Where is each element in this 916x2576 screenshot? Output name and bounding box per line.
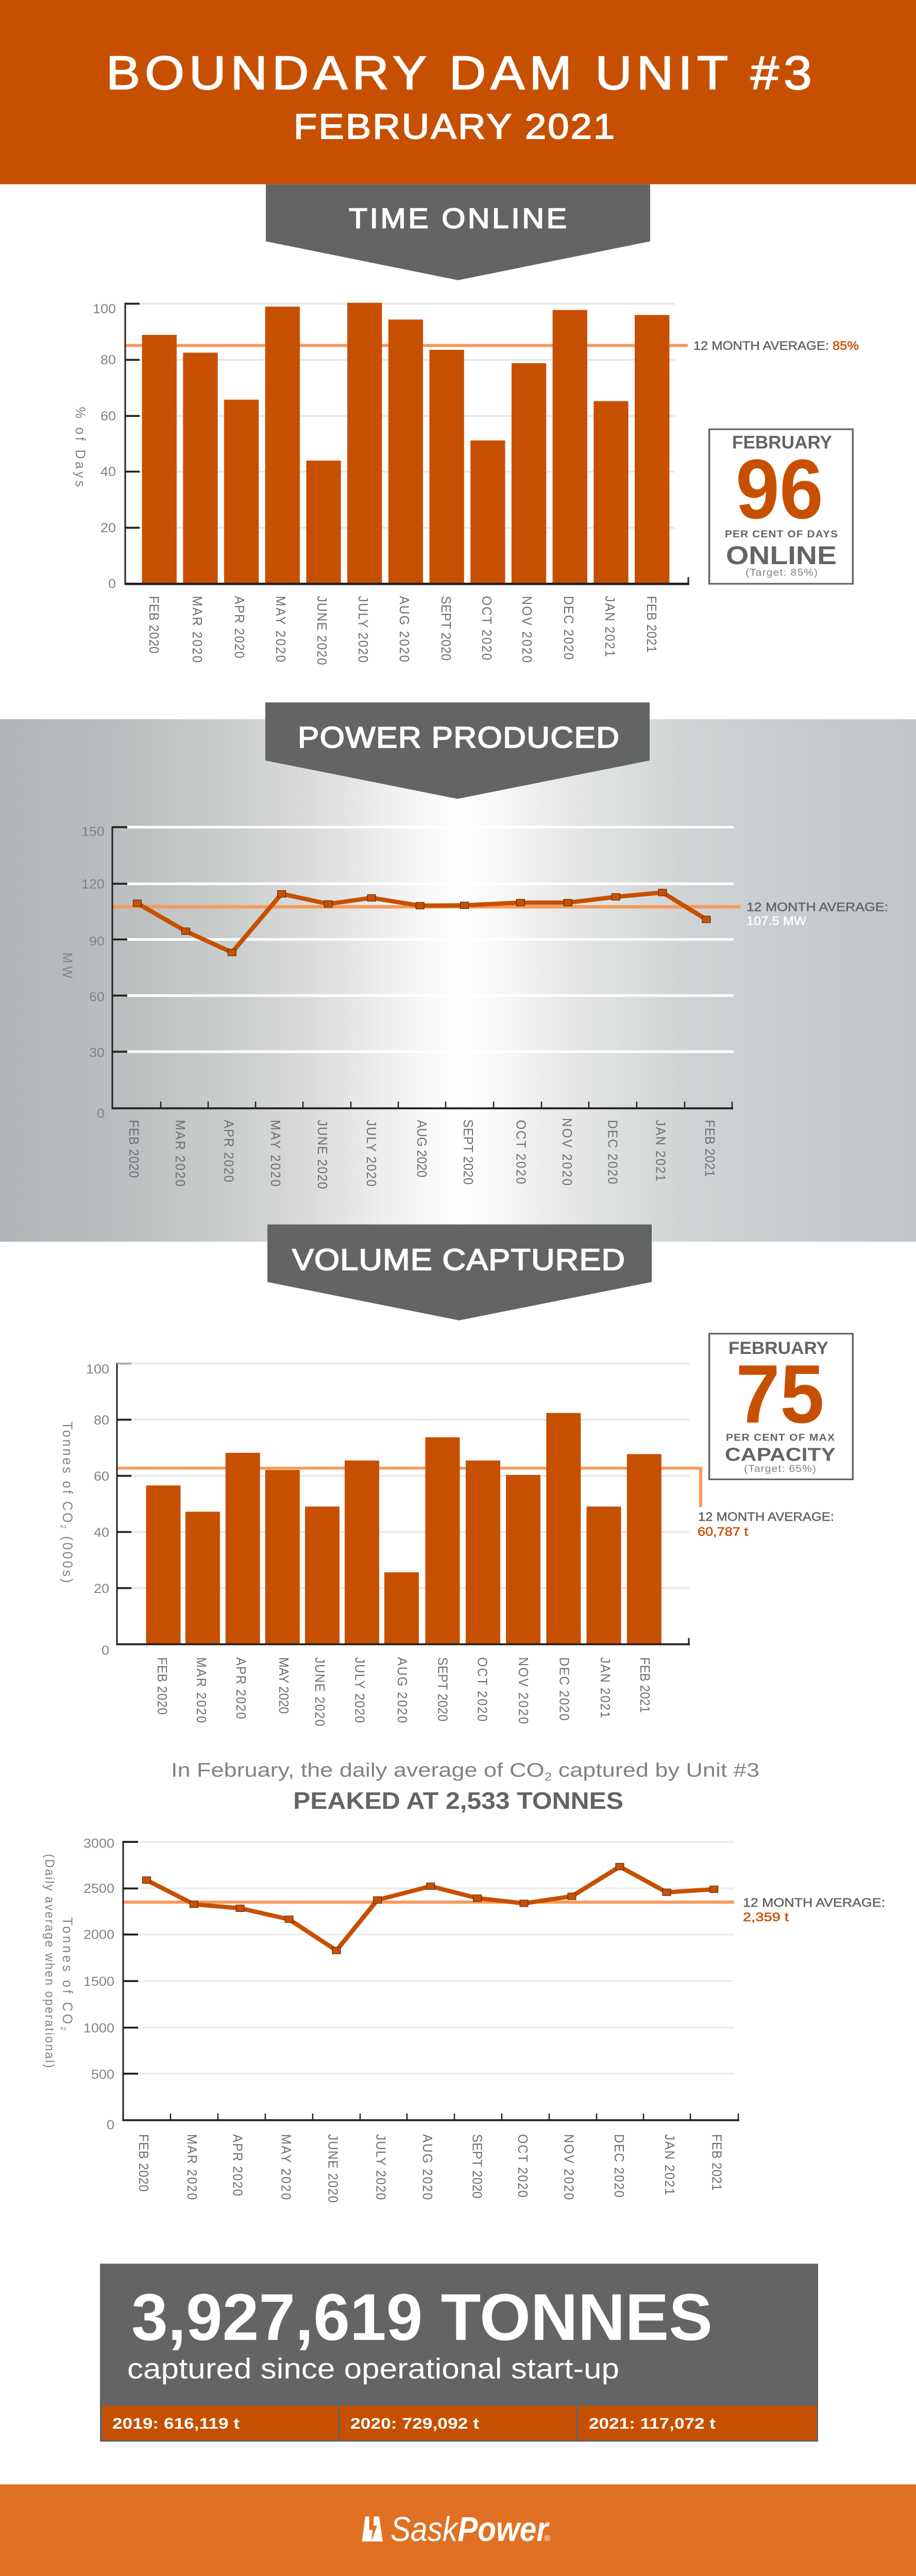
panel: time online bbox=[73, 184, 859, 665]
callout: february online: ONLINE bbox=[726, 541, 837, 570]
callout: february online: 96 bbox=[736, 442, 823, 536]
y axis labels: 150 bbox=[81, 824, 105, 839]
captured caption: captured since operational start-up bbox=[127, 2353, 619, 2385]
callout: february online: (Target: 85%) bbox=[745, 567, 818, 578]
month labels bbox=[126, 1118, 717, 1189]
y axis labels: 90 bbox=[89, 934, 105, 948]
axes bbox=[123, 1841, 739, 2121]
average label bbox=[743, 1896, 885, 1924]
icon: saskpower logo mark bbox=[362, 2517, 383, 2541]
y axis labels: 0 bbox=[107, 2117, 114, 2132]
12 month average line bbox=[117, 1468, 701, 1507]
bars bbox=[142, 303, 669, 584]
y axis labels bbox=[86, 1362, 109, 1658]
month labels: JAN 2021 bbox=[598, 1657, 613, 1718]
y axis labels: 2500 bbox=[83, 1881, 114, 1896]
month labels: OCT 2020 bbox=[474, 1657, 489, 1721]
average label: 60,787 t bbox=[698, 1525, 748, 1539]
callout: february capacity: (Target: 65%) bbox=[744, 1464, 816, 1475]
average label: 12 MONTH AVERAGE: bbox=[747, 900, 888, 914]
month labels: APR 2020 bbox=[232, 596, 247, 658]
month labels: AUG 2020 bbox=[414, 1120, 429, 1177]
month labels: NOV 2020 bbox=[561, 2134, 576, 2200]
month labels: OCT 2020 bbox=[515, 2134, 530, 2197]
y axis labels: 0 bbox=[101, 1643, 109, 1658]
month labels: JULY 2020 bbox=[373, 2134, 388, 2200]
y axis title: % of Days bbox=[73, 407, 89, 487]
title: BOUNDARY DAM UNIT #3 bbox=[106, 46, 812, 99]
intro sentence: In February, the daily average of CO bbox=[171, 1759, 511, 1781]
y axis labels: 1000 bbox=[83, 2021, 114, 2036]
month labels: SEPT 2020 bbox=[469, 2134, 484, 2198]
y axis labels bbox=[81, 824, 105, 1121]
subtitle: FEBRUARY 2021 bbox=[294, 107, 615, 147]
callout: february online: PER CENT OF DAYS bbox=[725, 529, 838, 540]
month labels bbox=[155, 1657, 652, 1726]
average label: 12 MONTH AVERAGE: bbox=[698, 1510, 834, 1524]
y axis labels: 20 bbox=[100, 520, 116, 535]
y axis labels: 500 bbox=[91, 2067, 114, 2082]
saskpower wordmark: SaskPower bbox=[391, 2510, 550, 2548]
month labels: JUNE 2020 bbox=[315, 1120, 330, 1189]
axes bbox=[116, 1363, 690, 1645]
month labels: JUNE 2020 bbox=[325, 2134, 340, 2202]
month labels: MAY 2020 bbox=[276, 1657, 291, 1714]
y axis labels: 100 bbox=[93, 301, 116, 316]
12 month average line bbox=[112, 905, 740, 909]
y axis labels: 0 bbox=[108, 577, 116, 591]
line chart: daily average bbox=[42, 1836, 885, 2202]
month labels: FEB 2021 bbox=[709, 2134, 724, 2191]
month labels: MAY 2020 bbox=[278, 2134, 293, 2200]
intro sentence: 2 bbox=[545, 1770, 552, 1783]
line chart: power produced bbox=[60, 824, 888, 1189]
month labels: AUG 2020 bbox=[420, 2134, 435, 2200]
callout: february capacity bbox=[709, 1334, 853, 1479]
month labels: DEC 2020 bbox=[556, 1657, 571, 1721]
y axis labels bbox=[93, 301, 116, 591]
callout: february online bbox=[709, 429, 853, 584]
y axis labels: 3000 bbox=[83, 1836, 114, 1851]
y axis labels: 30 bbox=[89, 1045, 105, 1060]
data markers bbox=[143, 1863, 718, 1954]
month labels: JUNE 2020 bbox=[314, 596, 329, 665]
y axis title: 2 bbox=[59, 2026, 67, 2030]
data markers bbox=[133, 889, 710, 956]
section heading: time online: TIME ONLINE bbox=[349, 202, 567, 234]
month labels: DEC 2020 bbox=[612, 2134, 626, 2197]
yearly totals: 2021: 117,072 t bbox=[589, 2415, 716, 2432]
month labels: FEB 2020 bbox=[146, 596, 161, 653]
callout: february capacity: FEBRUARY bbox=[728, 1338, 828, 1358]
yearly totals: 2020: 729,092 t bbox=[350, 2415, 479, 2432]
callout: february capacity: PER CENT OF MAX bbox=[726, 1432, 835, 1443]
data line bbox=[137, 892, 706, 953]
month labels bbox=[146, 596, 659, 665]
peak heading: PEAKED AT 2,533 TONNES bbox=[293, 1787, 623, 1814]
registered mark: ® bbox=[544, 2534, 551, 2543]
panel: total captured bbox=[100, 2264, 818, 2442]
y axis labels: 20 bbox=[94, 1581, 109, 1596]
y axis title: MW bbox=[60, 953, 76, 978]
y axis labels bbox=[83, 1836, 114, 2132]
callout: february capacity: 75 bbox=[736, 1348, 824, 1440]
total tonnes: 3,927,619 TONNES bbox=[131, 2280, 713, 2354]
month labels: JUNE 2020 bbox=[312, 1657, 327, 1726]
month labels: JAN 2021 bbox=[653, 1120, 668, 1181]
month labels: FEB 2020 bbox=[126, 1120, 141, 1178]
month labels: NOV 2020 bbox=[519, 596, 534, 663]
month labels: AUG 2020 bbox=[395, 1657, 410, 1723]
y axis labels: 40 bbox=[100, 464, 116, 479]
y axis labels: 60 bbox=[94, 1469, 109, 1484]
callout: february online: FEBRUARY bbox=[732, 432, 832, 452]
yearly totals bbox=[102, 2405, 817, 2440]
yearly totals: 2019: 616,119 t bbox=[112, 2415, 240, 2432]
month labels: MAR 2020 bbox=[194, 1657, 209, 1723]
average label bbox=[747, 900, 888, 928]
panel: power produced bbox=[0, 702, 916, 1242]
month labels: DEC 2020 bbox=[561, 596, 576, 659]
header banner bbox=[0, 0, 916, 184]
callout: february capacity: CAPACITY bbox=[725, 1444, 836, 1465]
average label: 12 MONTH AVERAGE: 85% bbox=[693, 339, 859, 353]
y axis labels: 40 bbox=[94, 1525, 109, 1540]
data line bbox=[147, 1867, 714, 1951]
month labels: MAR 2020 bbox=[184, 2134, 199, 2200]
month labels: DEC 2020 bbox=[605, 1120, 620, 1184]
month labels: APR 2020 bbox=[230, 2134, 245, 2196]
12 month average line bbox=[123, 1901, 734, 1904]
section heading: volume captured bbox=[267, 1225, 652, 1320]
month labels: MAY 2020 bbox=[268, 1120, 283, 1187]
month labels: MAR 2020 bbox=[190, 596, 205, 663]
average label: 12 MONTH AVERAGE: bbox=[743, 1896, 885, 1910]
month labels: SEPT 2020 bbox=[461, 1120, 476, 1184]
footer band bbox=[0, 2484, 916, 2576]
month labels: OCT 2020 bbox=[513, 1120, 528, 1184]
month labels: NOV 2020 bbox=[516, 1657, 531, 1724]
y axis labels: 120 bbox=[81, 877, 105, 891]
y axis title bbox=[42, 1854, 76, 2068]
y axis labels: 60 bbox=[100, 409, 116, 423]
month labels bbox=[136, 2134, 724, 2202]
y axis labels: 1500 bbox=[83, 1974, 114, 1989]
section heading: power produced bbox=[265, 702, 650, 799]
month labels: AUG 2020 bbox=[397, 596, 412, 662]
section heading: volume captured: VOLUME CAPTURED bbox=[292, 1243, 625, 1277]
month labels: JAN 2021 bbox=[602, 596, 617, 657]
y axis labels: 2000 bbox=[83, 1927, 114, 1942]
axes bbox=[125, 303, 689, 585]
month labels: APR 2020 bbox=[233, 1657, 248, 1719]
average label bbox=[698, 1510, 834, 1539]
month labels: OCT 2020 bbox=[479, 596, 494, 660]
panel: volume captured bbox=[59, 1225, 853, 1726]
section heading: time online bbox=[266, 184, 650, 280]
month labels: SEPT 2020 bbox=[435, 1657, 450, 1721]
axes bbox=[111, 826, 733, 1109]
month labels: JULY 2020 bbox=[355, 596, 370, 663]
bar chart: time online bbox=[73, 301, 859, 665]
month labels: FEB 2020 bbox=[155, 1657, 169, 1715]
intro sentence: captured by Unit #3 bbox=[552, 1759, 759, 1781]
month labels: FEB 2021 bbox=[637, 1657, 652, 1713]
month labels: JULY 2020 bbox=[352, 1657, 367, 1723]
month labels: MAY 2020 bbox=[273, 596, 288, 662]
month labels: FEB 2020 bbox=[136, 2134, 151, 2192]
y axis labels: 80 bbox=[94, 1413, 109, 1428]
month labels: FEB 2021 bbox=[644, 596, 659, 653]
y axis labels: 0 bbox=[97, 1106, 105, 1121]
average label: 107.5 MW bbox=[747, 914, 806, 928]
month labels: MAR 2020 bbox=[173, 1120, 188, 1187]
y axis title: (Daily average when operational) bbox=[42, 1854, 57, 2068]
y axis labels: 80 bbox=[100, 352, 116, 367]
y axis labels: 60 bbox=[89, 989, 105, 1004]
section heading: power produced: POWER PRODUCED bbox=[298, 721, 619, 754]
month labels: APR 2020 bbox=[221, 1120, 236, 1182]
average label: 2,359 t bbox=[743, 1910, 789, 1924]
panel: daily average captured bbox=[42, 1759, 885, 2202]
bar chart: volume captured bbox=[59, 1362, 834, 1726]
y axis title: Tonnes of CO bbox=[60, 1917, 76, 2024]
y axis title: Tonnes of CO bbox=[60, 1421, 76, 1522]
month labels: FEB 2021 bbox=[702, 1120, 717, 1177]
y axis title: (000s) bbox=[60, 1531, 76, 1583]
y axis labels: 100 bbox=[86, 1362, 109, 1377]
12 month average line bbox=[125, 344, 688, 347]
y axis title: 2 bbox=[59, 1524, 67, 1529]
month labels: SEPT 2020 bbox=[438, 596, 453, 660]
bars bbox=[146, 1413, 661, 1644]
month labels: JAN 2021 bbox=[662, 2134, 677, 2195]
month labels: JULY 2020 bbox=[364, 1120, 379, 1187]
month labels: NOV 2020 bbox=[559, 1118, 574, 1185]
